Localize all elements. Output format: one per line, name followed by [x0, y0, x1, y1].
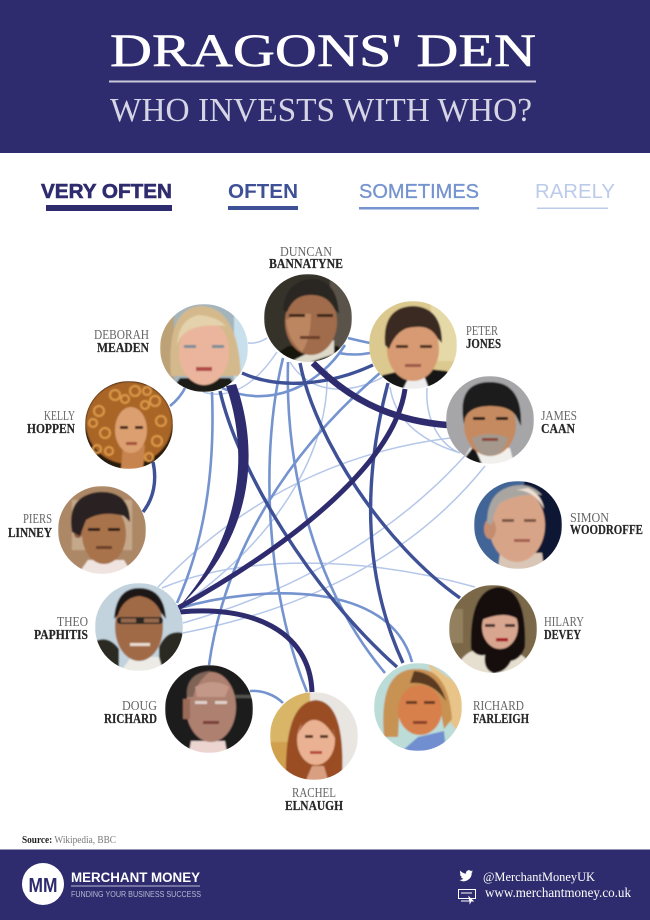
portrait: Simon Woodroffe: [474, 481, 562, 569]
name: Piers Linney: LINNEY: [8, 526, 52, 541]
name: Piers Linney: [8, 512, 52, 541]
name: Deborah Meaden: MEADEN: [97, 341, 149, 356]
legend: often: OFTEN: [228, 181, 298, 203]
name: Simon Woodroffe: SIMON: [570, 511, 609, 526]
legend: [41, 181, 615, 211]
portrait: James Caan: [446, 376, 534, 464]
name: Doug Richard: RICHARD: [104, 712, 157, 727]
name: Theo Paphitis: [34, 615, 88, 643]
name: Deborah Meaden: DEBORAH: [94, 328, 149, 343]
name: Peter Jones: JONES: [466, 337, 501, 352]
legend: sometimes: SOMETIMES: [359, 181, 479, 203]
legend: rarely: RARELY: [535, 181, 615, 203]
title: DRAGONS' DEN: [110, 25, 536, 77]
portrait: Rachel Elnaugh: [270, 692, 358, 780]
name: Theo Paphitis: PAPHITIS: [34, 628, 88, 643]
name: Simon Woodroffe: [570, 511, 643, 538]
name: Kelly Hoppen: [27, 409, 75, 437]
name: Doug Richard: [104, 699, 157, 727]
portrait: Hilary Devey: [449, 585, 537, 673]
name: Duncan Bannatyne: [269, 245, 343, 272]
name: James Caan: JAMES: [541, 409, 577, 424]
logo: Merchant Money: MM: [28, 875, 58, 897]
legend: very often: VERY OFTEN: [41, 181, 172, 203]
header banner: [0, 0, 650, 153]
name: Rachel Elnaugh: ELNAUGH: [285, 799, 343, 814]
name: James Caan: [541, 409, 577, 437]
name: Peter Jones: [466, 324, 501, 352]
source note: Source: Wikipedia, BBC: [22, 835, 116, 846]
portrait: Kelly Hoppen: [85, 381, 173, 469]
name: Duncan Bannatyne: BANNATYNE: [269, 257, 343, 272]
name: Rachel Elnaugh: [285, 786, 343, 814]
name: Peter Jones: PETER: [466, 324, 498, 339]
name: Deborah Meaden: [94, 328, 149, 356]
name: Theo Paphitis: THEO: [57, 615, 88, 630]
name: Richard Farleigh: RICHARD: [473, 699, 524, 714]
name: Kelly Hoppen: KELLY: [44, 409, 75, 424]
name: Hilary Devey: [544, 615, 584, 643]
portrait: Richard Farleigh: [374, 663, 462, 751]
subtitle: WHO INVESTS WITH WHO?: [110, 92, 532, 129]
logo: Merchant Money: [22, 863, 64, 905]
icon: twitter bird: [459, 870, 473, 881]
name: Doug Richard: DOUG: [122, 699, 157, 714]
twitter handle: @MerchantMoneyUK: [483, 869, 596, 884]
name: Richard Farleigh: FARLEIGH: [473, 712, 529, 727]
website address: www.merchantmoney.co.uk: [485, 886, 631, 901]
portrait: Theo Paphitis: [95, 583, 183, 671]
name: Piers Linney: PIERS: [23, 512, 52, 527]
portrait: Piers Linney: [58, 486, 146, 574]
name: James Caan: CAAN: [541, 422, 575, 437]
footer banner: [0, 850, 650, 920]
portrait: Doug Richard: [165, 665, 253, 753]
portrait: Peter Jones: [369, 301, 457, 389]
brand name and tagline: [71, 870, 201, 899]
name: Rachel Elnaugh: RACHEL: [292, 786, 336, 801]
brand name and tagline: MERCHANT MONEY: [71, 870, 200, 885]
network of investment links: [143, 338, 485, 703]
name: Richard Farleigh: [473, 699, 529, 727]
name: Hilary Devey: HILARY: [544, 615, 584, 630]
name: Kelly Hoppen: HOPPEN: [27, 422, 75, 437]
name: Duncan Bannatyne: DUNCAN: [280, 245, 332, 260]
icon: web browser: [458, 890, 476, 903]
portrait: Duncan Bannatyne: [264, 274, 352, 364]
brand name and tagline: FUNDING YOUR BUSINESS SUCCESS: [71, 890, 201, 899]
name: Hilary Devey: DEVEY: [544, 628, 581, 643]
portrait: Deborah Meaden: [160, 304, 248, 392]
